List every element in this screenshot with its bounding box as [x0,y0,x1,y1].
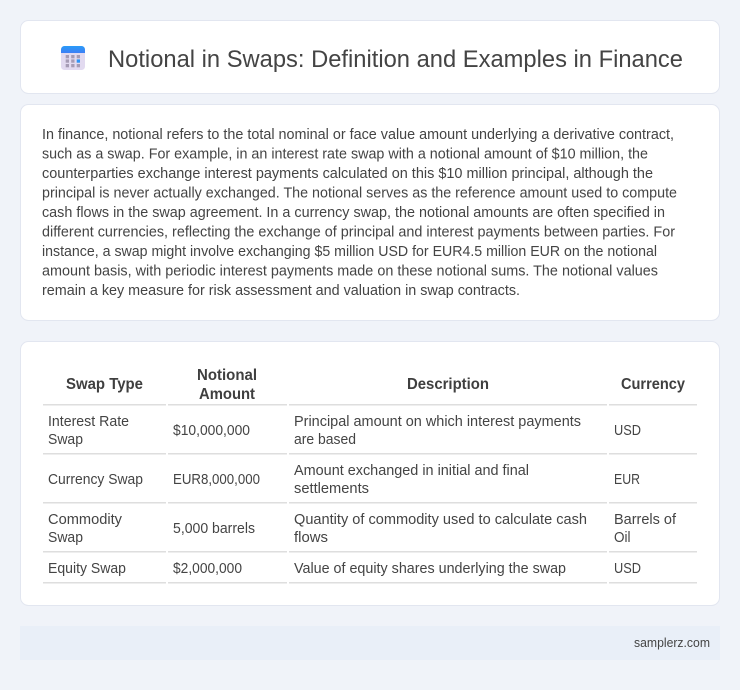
footer: samplerz.com [634,636,710,650]
table row: commodity swap: Commodity [48,512,123,528]
text block: paragraph: cash flows in the swap agreement. In a currency swap, the notional amounts are often specified in [42,205,665,221]
table header: Swap Type [66,376,143,393]
text block: paragraph: different currencies, reflecting the exchange of principal and interest payments between parties. For [42,224,675,240]
table row: equity swap: Value of equity shares underlying the swap [294,561,566,577]
table row: equity swap: Equity Swap [48,561,126,577]
text block: paragraph [42,127,677,299]
table row: commodity swap: 5,000 barrels [173,521,255,537]
table row: commodity swap: flows [294,530,328,546]
panel: title card [20,20,720,94]
table row: interest rate swap [43,414,697,454]
table row: equity swap [43,561,697,584]
table row: interest rate swap: Swap [48,432,83,448]
table row: equity swap: USD [614,561,641,577]
panel: intro paragraph [20,104,720,320]
table header: Amount [199,386,256,403]
table row: currency swap: settlements [294,481,369,497]
table row: interest rate swap: USD [614,423,641,439]
text block: paragraph: such as a swap. For example, in an interest rate swap with a notional amount of $10 million, the [42,146,648,162]
table row: commodity swap: Swap [48,530,83,546]
table row: currency swap [43,463,697,504]
text block: paragraph: instance, a swap might involve exchanging $5 million USD for EUR4.5 million EUR on the notional [42,244,657,260]
panel: swap table [20,342,720,606]
table row: interest rate swap: Interest Rate [48,414,129,430]
table header: Notional [197,367,257,384]
table row: commodity swap: Barrels of [614,512,677,528]
text block: paragraph: remain a key measure for risk assessment and valuation in swap contracts. [42,283,520,299]
table row: commodity swap [43,512,697,552]
table header: Description [407,376,489,393]
footer [20,626,720,660]
table row: currency swap: EUR8,000,000 [173,472,260,488]
table row: interest rate swap: are based [294,432,356,448]
icon: calendar [61,46,85,70]
title: Notional in Swaps: Definition and Examples in Finance [108,46,683,73]
table row: commodity swap: Quantity of commodity used to calculate cash [294,512,587,528]
table row: currency swap: Amount exchanged in initial and final [294,463,529,479]
table header: Currency [621,376,685,393]
text block: paragraph: amount basis, with periodic interest payments made on these notional sums. The notional values [42,264,658,280]
table row: equity swap: $2,000,000 [173,561,242,577]
table row: currency swap: Currency Swap [48,472,143,488]
text block: paragraph: counterparties exchange interest payments calculated on this $10 million principal, although the [42,166,653,182]
table row: interest rate swap: $10,000,000 [173,423,250,439]
table row: currency swap: EUR [614,472,640,488]
table header [43,367,697,406]
table row: interest rate swap: Principal amount on which interest payments [294,414,581,430]
text block: paragraph: principal is never actually exchanged. The notional serves as the reference amount used to compute [42,186,677,202]
text block: paragraph: In finance, notional refers to the total nominal or face value amount underlying a derivative contract, [42,127,674,143]
table row: commodity swap: Oil [614,530,630,546]
